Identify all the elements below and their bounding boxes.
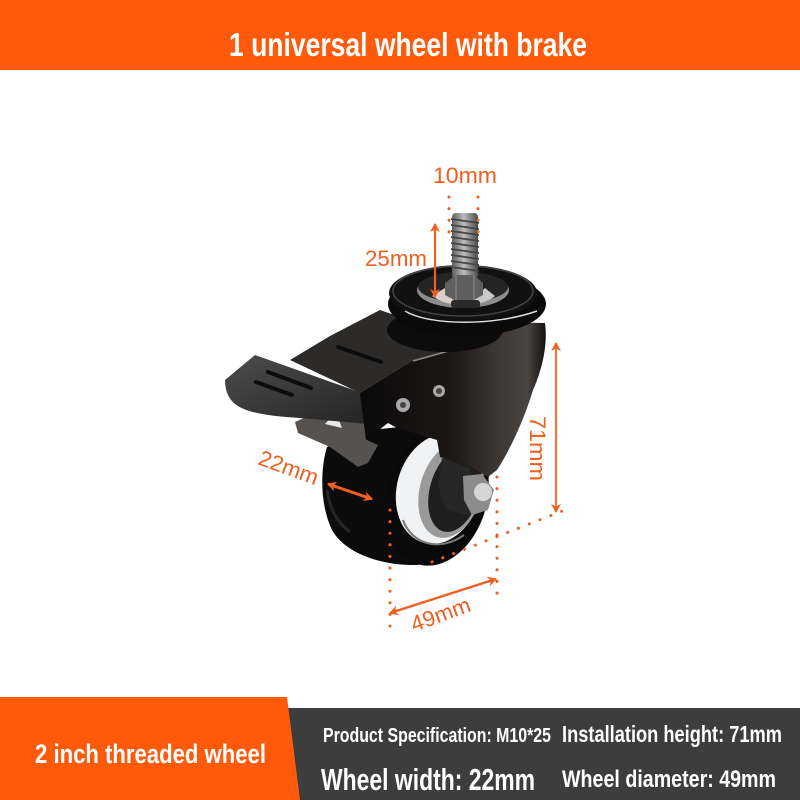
axle nut and bolt (438, 458, 494, 516)
footer: Wheel width: Wheel width: 22mm (321, 762, 535, 797)
title banner (0, 0, 800, 70)
threaded stud with nut (445, 213, 483, 308)
footer: Product Specification: Product Specification: M10*25 (323, 725, 551, 747)
footer orange label: 2 inch threaded wheel (35, 739, 266, 769)
dimension: 71mm: 71mm (525, 416, 550, 481)
brake pedal (225, 355, 368, 424)
fork screws (396, 385, 445, 412)
dimension dotted guides (390, 197, 570, 634)
dimension: 49mm: 49mm (407, 592, 474, 637)
wheel (322, 416, 504, 578)
brake pin highlight (325, 412, 342, 428)
dimension: 25mm: 25mm (365, 246, 427, 271)
dimension: 10mm: 10mm (433, 163, 497, 188)
top brake plate (290, 310, 477, 393)
dimension: 25mm (365, 224, 435, 297)
top mounting plate (388, 265, 546, 336)
dimension: 49mm (390, 579, 496, 637)
footer specification panel (280, 708, 800, 800)
brake lever underside (295, 405, 378, 467)
caster wheel product illustration (225, 213, 546, 578)
dimension: 22mm: 22mm (255, 445, 322, 490)
dimension: 22mm (255, 445, 372, 499)
title banner: 1 universal wheel with brake (229, 26, 587, 63)
footer orange label (0, 697, 300, 800)
swivel fork housing (360, 308, 546, 477)
